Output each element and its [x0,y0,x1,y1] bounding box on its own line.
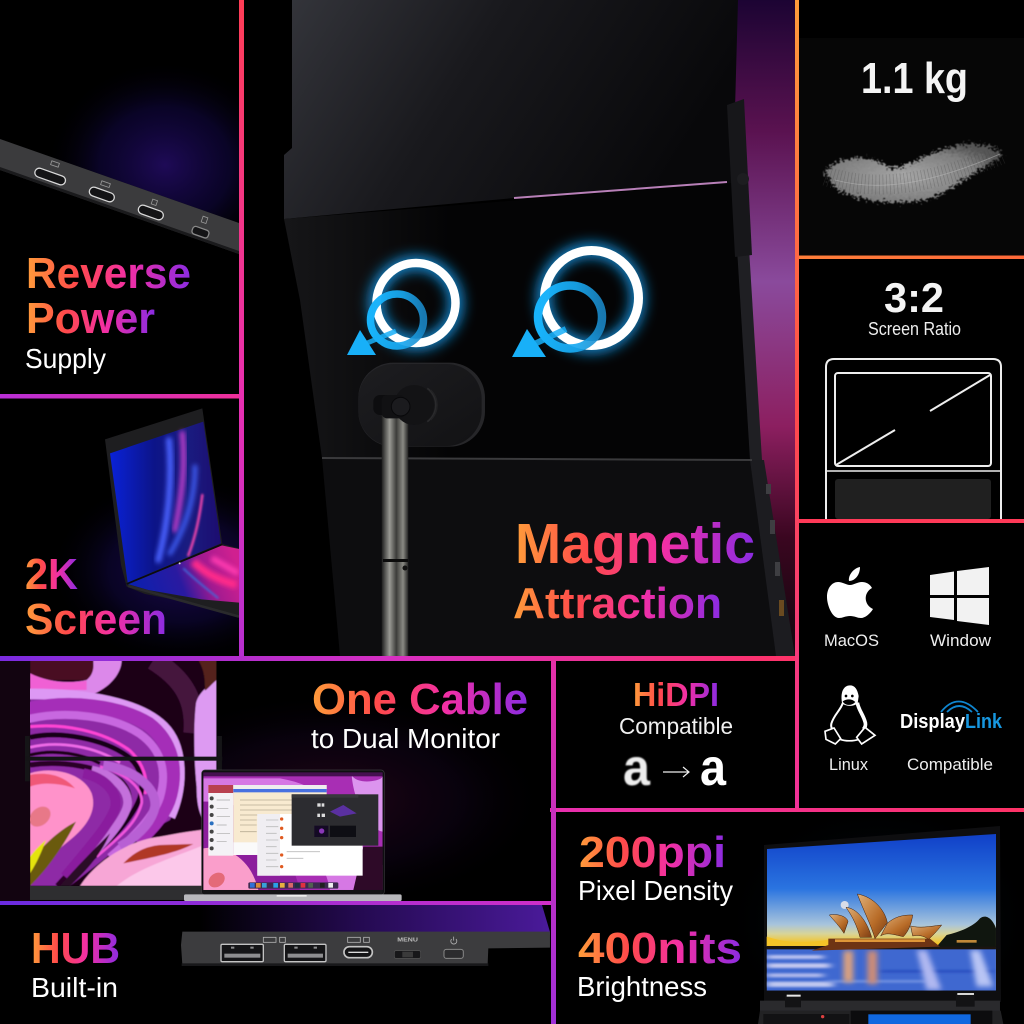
external monitor with swirl wallpaper [25,660,222,900]
panel: magnetic attraction [284,0,795,656]
icon: feather [824,144,1003,202]
heading: Reverse Power Supply: Power [26,294,155,343]
icon: windows [930,567,989,625]
panel: reverse power supply [0,82,239,374]
icon: apple [827,567,873,618]
stacked monitors [284,0,795,656]
label: Pixel Density: Pixel Density [578,875,733,906]
heading: 2K Screen: Screen [25,595,167,644]
low-res letter a: a [623,739,651,797]
laptop with desktop apps [184,770,402,901]
heading: One Cable: One Cable [312,675,528,724]
heading: HUB: HUB [31,924,120,973]
device edge with ports: MENU [397,938,418,944]
label: Linux: Linux [829,755,868,774]
panel: 2K screen [26,408,239,644]
glowing magnetic rings [376,250,638,346]
folded monitor illustration [105,408,239,617]
logo: DisplayLink [900,702,1003,733]
icon: linux penguin [825,685,875,744]
panel: one cable dual monitor [0,660,550,910]
subheading: Built-in: Built-in [31,972,118,1003]
heading: HiDPI: HiDPI [633,676,719,713]
device edge with ports [0,139,239,254]
panel: hub built-in [31,905,550,1003]
heading: Magnetic Attraction: Magnetic [515,512,755,576]
panel: HiDPI compatible [619,676,733,797]
label: Screen Ratio: Screen Ratio [868,319,961,339]
label: Compatible: Compatible [907,755,993,774]
heading: Magnetic Attraction [513,512,755,628]
panel: screen ratio 3:2 [826,274,1001,519]
label: Compatible: Compatible [619,713,733,739]
magnetic mount and pole [358,363,485,656]
laptop with opera house photo [758,826,1003,1024]
value: 1.1 kg: 1.1 kg [861,54,968,103]
label: Window: Window [930,631,992,650]
high-res letter a: a [700,739,727,797]
heading: Reverse Power Supply [25,249,191,374]
logo: DisplayLink: Link [965,711,1003,733]
panel: weight 1.1 kg [799,38,1024,255]
value: 3:2: 3:2 [884,274,944,321]
harbour water [767,948,996,991]
heading: 2K Screen: 2K [25,550,78,599]
heading: Reverse Power Supply: Supply [25,343,106,374]
panel: pixel density and brightness [578,826,1004,1024]
icon: blue arrow right [512,286,602,357]
label: MacOS: MacOS [824,631,879,650]
heading: 2K Screen [25,550,167,644]
icon: blue arrow left [347,294,424,355]
subheading: to Dual Monitor: to Dual Monitor [311,723,500,754]
panel: OS compatibility [824,567,1003,774]
heading: 200ppi: 200ppi [579,828,726,877]
device edge with ports [181,932,550,966]
heading: Reverse Power Supply: Reverse [26,249,191,298]
heading: 400nits: 400nits [578,924,742,973]
logo: DisplayLink: Display [900,711,966,733]
icon: 3:2 laptop outline [826,359,1001,519]
label: Brightness: Brightness [577,971,707,1002]
heading: Magnetic Attraction: Attraction [513,579,722,628]
icon: arrow [663,767,689,777]
keyboard deck and hinges [758,993,1003,1024]
